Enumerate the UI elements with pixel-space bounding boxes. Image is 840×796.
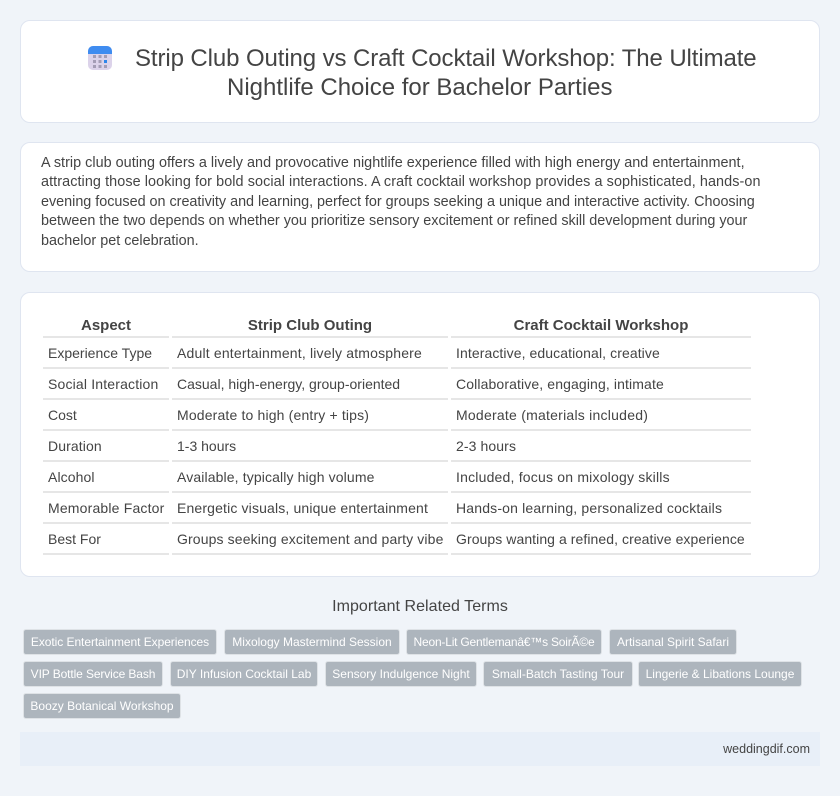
text: Interactive, educational, creative <box>456 345 660 361</box>
tag: Neon-Lit Gentlemanâ€™s SoirÃ©e <box>414 635 594 649</box>
tag <box>23 693 181 719</box>
tag <box>170 661 318 687</box>
text: Hands-on learning, personalized cocktails <box>456 500 722 516</box>
text: Included, focus on mixology skills <box>456 469 670 485</box>
panel: comparison table <box>20 292 820 577</box>
text: Moderate to high (entry + tips) <box>177 407 369 423</box>
tag: Boozy Botanical Workshop <box>30 699 174 713</box>
tag <box>483 661 633 687</box>
tag: VIP Bottle Service Bash <box>31 667 155 681</box>
row: memorable factor: Memorable Factor <box>48 500 164 516</box>
tag <box>609 629 737 655</box>
tag: Mixology Mastermind Session <box>232 635 392 649</box>
text: Collaborative, engaging, intimate <box>456 376 664 392</box>
title line 2: Nightlife Choice for Bachelor Parties <box>227 74 613 101</box>
row: cost: Cost <box>48 407 77 423</box>
row: social interaction: Social Interaction <box>48 376 158 392</box>
row: best for: Best For <box>48 531 101 547</box>
tag <box>325 661 477 687</box>
tag <box>224 629 400 655</box>
row: duration: Duration <box>48 438 102 454</box>
text block: introduction: A strip club outing offers a lively and provocative nightlife experience filled with high energy and entertainment, <box>41 155 745 171</box>
row: experience type: Experience Type <box>48 345 152 361</box>
text block: introduction: evening focused on creativity and learning, perfect for groups seeking a unique and interactive activity. Choosing <box>41 194 755 210</box>
icon: calendar <box>88 46 112 70</box>
row: alcohol: Alcohol <box>48 469 95 485</box>
table header: strip club outing: Strip Club Outing <box>248 317 372 334</box>
tag <box>23 661 163 687</box>
text block: introduction: between the two depends on whether you prioritize sensory excitement or refined skill development during your <box>41 213 747 229</box>
panel: header <box>20 20 820 123</box>
table header: craft cocktail workshop: Craft Cocktail Workshop <box>514 317 688 334</box>
text: Moderate (materials included) <box>456 407 648 423</box>
tag: Exotic Entertainment Experiences <box>31 635 209 649</box>
tag <box>23 629 217 655</box>
footer text: weddingdif.com <box>723 742 810 756</box>
tag: DIY Infusion Cocktail Lab <box>177 667 311 681</box>
text block: introduction <box>41 155 761 249</box>
tag <box>638 661 802 687</box>
text: Adult entertainment, lively atmosphere <box>177 345 422 361</box>
text block: introduction: bachelor pet celebration. <box>41 233 199 249</box>
panel: introduction <box>20 142 820 272</box>
text block: introduction: attracting those looking for bold social interactions. A craft cocktail workshop provides a sophisticated, hands-on <box>41 174 761 190</box>
text: Groups wanting a refined, creative experience <box>456 531 745 547</box>
table header: aspect: Aspect <box>81 317 131 334</box>
tag: Lingerie & Libations Lounge <box>646 667 794 681</box>
tag: Sensory Indulgence Night <box>332 667 470 681</box>
tag <box>406 629 602 655</box>
text: 1-3 hours <box>177 438 236 454</box>
tag: Artisanal Spirit Safari <box>617 635 729 649</box>
text: Groups seeking excitement and party vibe <box>177 531 443 547</box>
tag: Small-Batch Tasting Tour <box>492 667 624 681</box>
text: 2-3 hours <box>456 438 516 454</box>
text: Energetic visuals, unique entertainment <box>177 500 428 516</box>
text: Casual, high-energy, group-oriented <box>177 376 400 392</box>
title: Strip Club Outing vs Craft Cocktail Workshop: The Ultimate <box>135 45 757 72</box>
text: Available, typically high volume <box>177 469 375 485</box>
footer bar <box>20 732 820 766</box>
heading: important related terms: Important Related Terms <box>332 598 508 615</box>
